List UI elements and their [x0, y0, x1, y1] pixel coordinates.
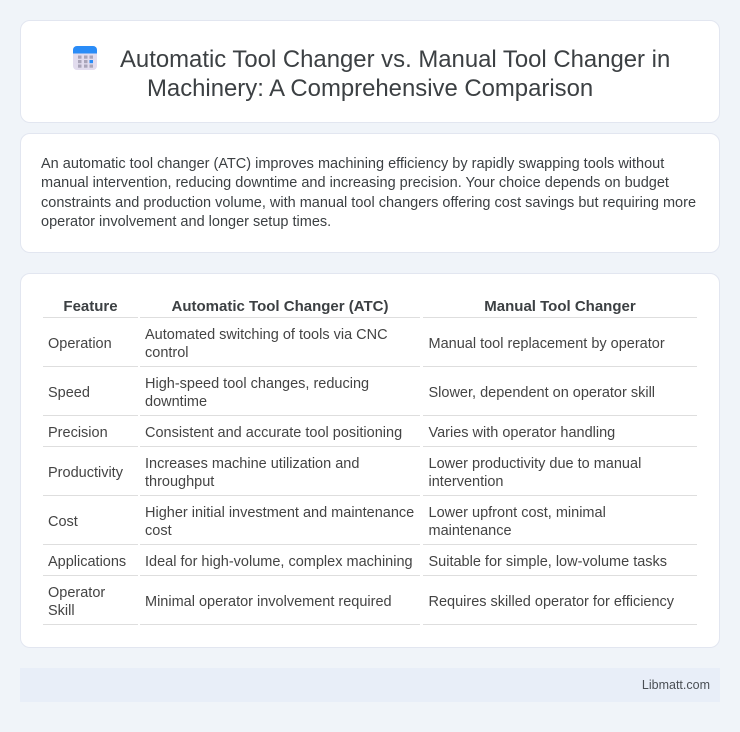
icon: calendar — [73, 46, 97, 70]
footer bar — [20, 668, 720, 702]
row: Operation: Automated switching of tools via CNC — [145, 327, 388, 343]
intro paragraph: manual intervention, reducing downtime and increasing precision. Your choice depends on budget — [41, 175, 669, 191]
row: Speed: downtime — [145, 394, 207, 410]
row: Productivity: Lower productivity due to manual — [428, 456, 641, 472]
row: Productivity: throughput — [145, 474, 214, 490]
title — [120, 46, 670, 102]
row: Cost: Lower upfront cost, minimal — [428, 505, 606, 521]
header row — [43, 298, 697, 318]
row: Applications: Suitable for simple, low-volume tasks — [428, 554, 667, 570]
row: Speed — [43, 376, 697, 416]
header row: Manual Tool Changer — [484, 298, 636, 315]
row: Operation — [43, 327, 697, 367]
row: Speed: Slower, dependent on operator skill — [428, 385, 655, 401]
row: Speed: High-speed tool changes, reducing — [145, 376, 369, 392]
row: Cost: Cost — [48, 514, 78, 530]
row: Applications: Applications — [48, 554, 126, 570]
row: Productivity: intervention — [428, 474, 503, 490]
row: Operator Skill: Skill — [48, 603, 75, 619]
row: Operator Skill: Operator — [48, 585, 105, 601]
row: Operation: Operation — [48, 336, 112, 352]
row: Applications — [43, 554, 697, 576]
header row: Feature — [63, 298, 118, 315]
row: Precision: Varies with operator handling — [428, 425, 615, 441]
title: Automatic Tool Changer vs. Manual Tool Changer in — [120, 46, 670, 73]
header row: Automatic Tool Changer (ATC) — [172, 298, 388, 315]
intro paragraph: operator involvement and longer setup times. — [41, 214, 331, 230]
row: Operator Skill: Requires skilled operator for efficiency — [428, 594, 674, 610]
row: Precision: Precision — [48, 425, 108, 441]
intro card — [20, 133, 720, 253]
title: Machinery: A Comprehensive Comparison — [147, 75, 593, 102]
row: Cost: cost — [145, 523, 172, 539]
row: Operator Skill — [43, 585, 697, 625]
row: Precision: Consistent and accurate tool positioning — [145, 425, 402, 441]
row: Operator Skill: Minimal operator involvement required — [145, 594, 392, 610]
row: Productivity: Increases machine utilization and — [145, 456, 359, 472]
footer credit: Libmatt.com — [642, 678, 710, 692]
row: Productivity — [43, 456, 697, 496]
row: Operation: Manual tool replacement by operator — [428, 336, 665, 352]
header card — [20, 20, 720, 123]
row: Precision — [43, 425, 697, 447]
row: Cost: Higher initial investment and maintenance — [145, 505, 414, 521]
row: Cost — [43, 505, 697, 545]
intro paragraph — [41, 156, 696, 230]
intro paragraph: An automatic tool changer (ATC) improves machining efficiency by rapidly swapping tools without — [41, 156, 664, 172]
row: Operation: control — [145, 345, 189, 361]
row: Cost: maintenance — [428, 523, 512, 539]
intro paragraph: constraints and production volume, with manual tool changers offering cost savings but requiring more — [41, 195, 696, 211]
table card — [20, 273, 720, 648]
row: Productivity: Productivity — [48, 465, 123, 481]
row: Applications: Ideal for high-volume, complex machining — [145, 554, 413, 570]
row: Speed: Speed — [48, 385, 90, 401]
